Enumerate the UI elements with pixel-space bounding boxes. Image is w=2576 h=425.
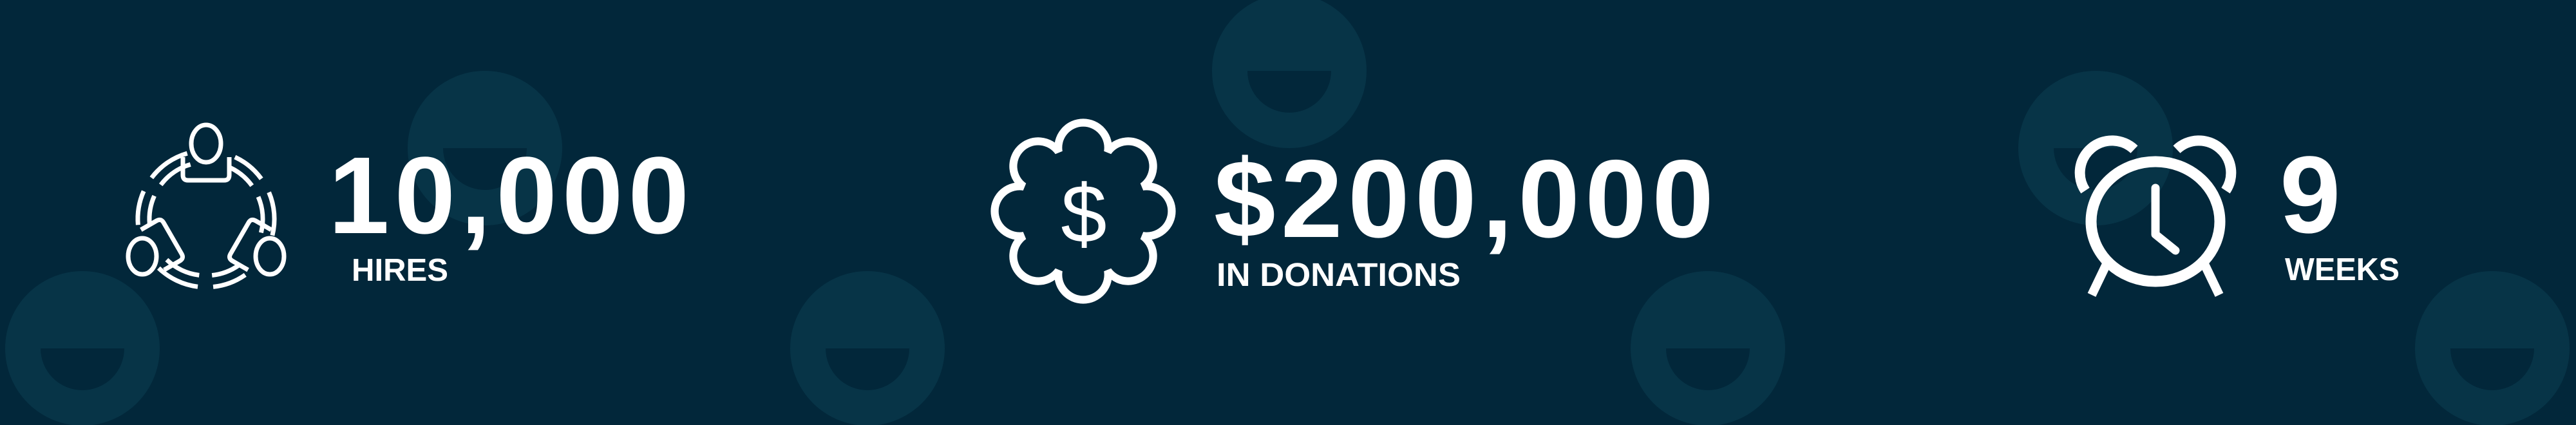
- stat: $200,000: $200,000: [1214, 137, 1714, 261]
- label: weeks: WEEKS: [2285, 252, 2400, 287]
- panel: hires: [118, 125, 689, 309]
- icon: people circle: [118, 125, 284, 309]
- icon: alarm clock: [2080, 140, 2231, 295]
- label: in donations: IN DONATIONS: [1217, 256, 1461, 293]
- stat: 9: 9: [2280, 134, 2341, 256]
- stat: 10,000: 10,000: [328, 135, 689, 257]
- panel: donations: [995, 123, 1714, 299]
- panel: weeks: [2080, 134, 2400, 295]
- icon: flower with dollar: $: [1061, 168, 1107, 260]
- label: hires: HIRES: [352, 253, 448, 288]
- icon: flower with dollar: [995, 123, 1171, 299]
